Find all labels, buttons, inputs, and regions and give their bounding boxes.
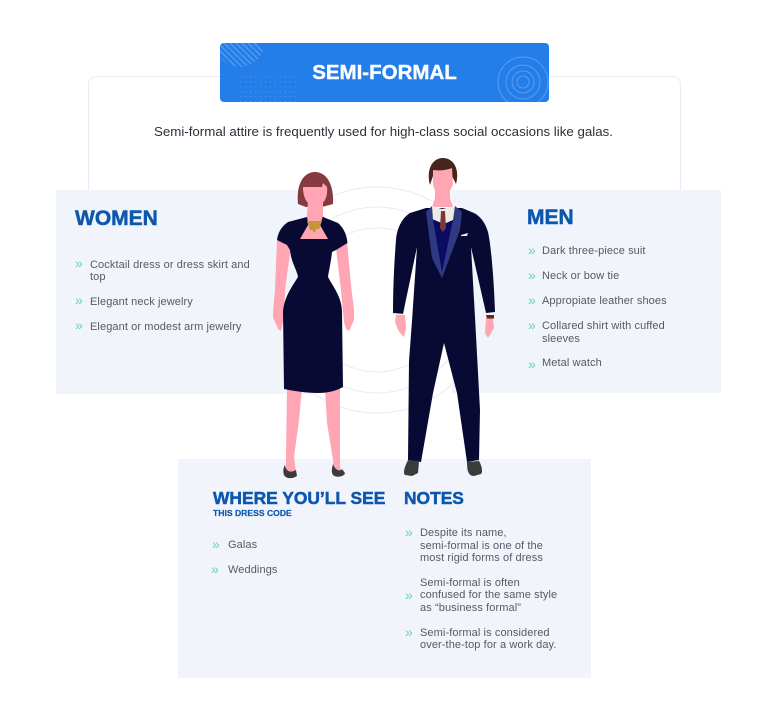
list item: watch: » xyxy=(528,356,536,372)
list item: shirt: sleeves xyxy=(542,332,580,344)
note: rigid dress xyxy=(405,524,543,564)
list item: shirt xyxy=(528,317,665,344)
list item: cocktail dress: Cocktail dress or dress skirt and xyxy=(90,258,250,270)
note: confused with business formal: Semi-formal is often xyxy=(420,576,520,588)
note: rigid dress: Despite its name, xyxy=(420,527,507,539)
list item: arm jewelry: Elegant or modest arm jewelry xyxy=(90,321,241,333)
list item: tie: Neck or bow tie xyxy=(542,270,619,282)
note: over the top: Semi-formal is considered xyxy=(420,626,550,638)
heading: women: WOMEN xyxy=(75,207,158,230)
list item: cocktail dress: » xyxy=(75,255,83,271)
note: confused with business formal: » xyxy=(405,587,413,603)
note: confused with business formal xyxy=(405,576,557,614)
list item: cocktail dress xyxy=(75,255,250,283)
note: confused with business formal: as “business formal” xyxy=(420,602,521,614)
intro text: Semi-formal attire is frequently used for high-class social occasions like galas. xyxy=(154,124,613,139)
list item: arm jewelry xyxy=(75,317,242,333)
panel: where and notes xyxy=(178,459,591,678)
heading: where you'll see xyxy=(212,488,385,518)
list item: arm jewelry: » xyxy=(75,317,83,333)
list item: weddings xyxy=(211,561,278,577)
note: over the top xyxy=(405,624,556,651)
list item: neck jewelry xyxy=(75,292,193,308)
list item: neck jewelry: » xyxy=(75,292,83,308)
list item: galas: Galas xyxy=(228,539,257,551)
note: confused with business formal: confused for the same style xyxy=(420,589,557,601)
figure: man xyxy=(393,158,495,476)
heading: where you'll see: THIS DRESS CODE xyxy=(213,508,292,518)
heading: notes: NOTES xyxy=(404,488,464,508)
list item: tie: » xyxy=(528,267,536,283)
list item: watch xyxy=(528,356,602,372)
list item: weddings: » xyxy=(211,561,219,577)
list item: shoes: » xyxy=(528,292,536,308)
banner title: SEMI-FORMAL xyxy=(312,61,457,84)
note: rigid dress: » xyxy=(405,524,413,540)
list item: cocktail dress: top xyxy=(90,271,106,283)
heading: where you'll see: WHERE YOU’LL SEE xyxy=(213,488,385,508)
list item: suit xyxy=(528,242,646,258)
panel: women xyxy=(56,190,316,394)
frame: intro outline xyxy=(88,76,681,197)
list item: shirt: Collared shirt with cuffed xyxy=(542,320,665,332)
list item: galas: » xyxy=(212,536,220,552)
list item: suit: » xyxy=(528,242,536,258)
note: rigid dress: semi-formal is one of the xyxy=(420,540,543,552)
note: over the top: over-the-top for a work day. xyxy=(420,639,556,651)
list item: shoes xyxy=(528,292,667,308)
note: rigid dress: most rigid forms of dress xyxy=(420,552,543,564)
note: over the top: » xyxy=(405,624,413,640)
banner: semi-formal xyxy=(220,43,549,102)
list item: shirt: » xyxy=(528,317,536,333)
list item: galas xyxy=(212,536,257,552)
heading: men: MEN xyxy=(527,206,574,229)
banner decoration xyxy=(220,43,548,102)
list item: weddings: Weddings xyxy=(228,564,278,576)
panel: men xyxy=(452,190,721,393)
list item: watch: Metal watch xyxy=(542,357,602,369)
list item: tie xyxy=(528,267,619,283)
list item: neck jewelry: Elegant neck jewelry xyxy=(90,296,193,308)
list item: shoes: Appropiate leather shoes xyxy=(542,295,667,307)
list item: suit: Dark three-piece suit xyxy=(542,245,646,257)
figure: woman xyxy=(273,172,354,478)
